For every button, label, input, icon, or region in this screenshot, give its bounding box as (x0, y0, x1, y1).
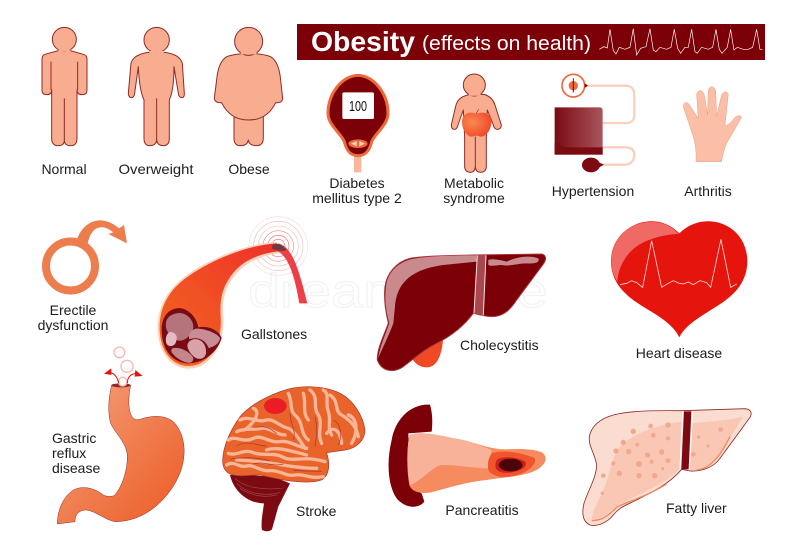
heading: Obesity (311, 26, 415, 57)
label: overweight: Overweight (118, 161, 194, 177)
panel: cholecystitis (377, 254, 546, 371)
label: obese: Obese (228, 161, 270, 177)
label: disease: disease (52, 460, 100, 476)
panel: gastric reflux (52, 347, 184, 524)
label: cholecystitis: Cholecystitis (460, 337, 539, 353)
panel: fatty liver (583, 409, 751, 525)
icon: pancreas (389, 405, 546, 507)
label: diabetes type: mellitus type 2 (312, 190, 402, 206)
panel: gallstones (158, 217, 308, 369)
label: erectile: Erectile (50, 302, 97, 318)
label: gallstones: Gallstones (241, 326, 307, 342)
watermark: dreamstime (248, 264, 548, 317)
icon: gallbladder with stones (158, 217, 308, 369)
icon: pale spotted liver (583, 409, 751, 525)
icon: hand (683, 87, 742, 162)
label: stroke: Stroke (296, 503, 337, 519)
label: metabolic: Metabolic (444, 175, 504, 191)
icon: blood pressure cuff (555, 74, 634, 172)
icon: drooping male symbol (46, 220, 127, 290)
label: dysfunction: dysfunction (38, 317, 108, 333)
label: arthritis: Arthritis (684, 183, 732, 199)
subheading: (effects on health) (422, 32, 591, 55)
icon: glucose meter (328, 75, 388, 172)
icon: heart with ecg (611, 221, 747, 337)
label: fatty liver: Fatty liver (666, 500, 727, 516)
panel: diabetes (312, 75, 402, 206)
label: reflux: reflux (52, 445, 86, 461)
label: syndrome: syndrome (443, 190, 505, 206)
panel: heart disease (611, 221, 747, 361)
number: 100: 100 (349, 98, 367, 115)
panel: hypertension (552, 74, 634, 199)
icon: body with apple (451, 74, 501, 172)
label: normal: Normal (41, 161, 87, 177)
panel: erectile dysfunction (38, 220, 127, 333)
panel: metabolic syndrome (443, 74, 505, 206)
panel: pancreatitis (389, 405, 546, 518)
label: diabetes: Diabetes (329, 175, 385, 191)
figure: normal (42, 27, 87, 146)
panel: stroke (223, 387, 365, 531)
icon: stomach with reflux (57, 347, 184, 524)
panel: body types (41, 27, 283, 177)
panel: arthritis (683, 87, 742, 199)
label: heart disease: Heart disease (636, 345, 722, 361)
icon: liver with gallbladder (377, 254, 546, 371)
banner background (297, 24, 765, 60)
panel: title banner (297, 24, 765, 60)
figure: overweight (128, 27, 184, 146)
label: pancreatitis: Pancreatitis (445, 502, 519, 518)
ecg line (599, 29, 763, 55)
label: hypertension: Hypertension (552, 183, 634, 199)
label: gastric: Gastric (52, 430, 96, 446)
figure: obese (214, 27, 283, 146)
icon: brain (223, 387, 365, 531)
